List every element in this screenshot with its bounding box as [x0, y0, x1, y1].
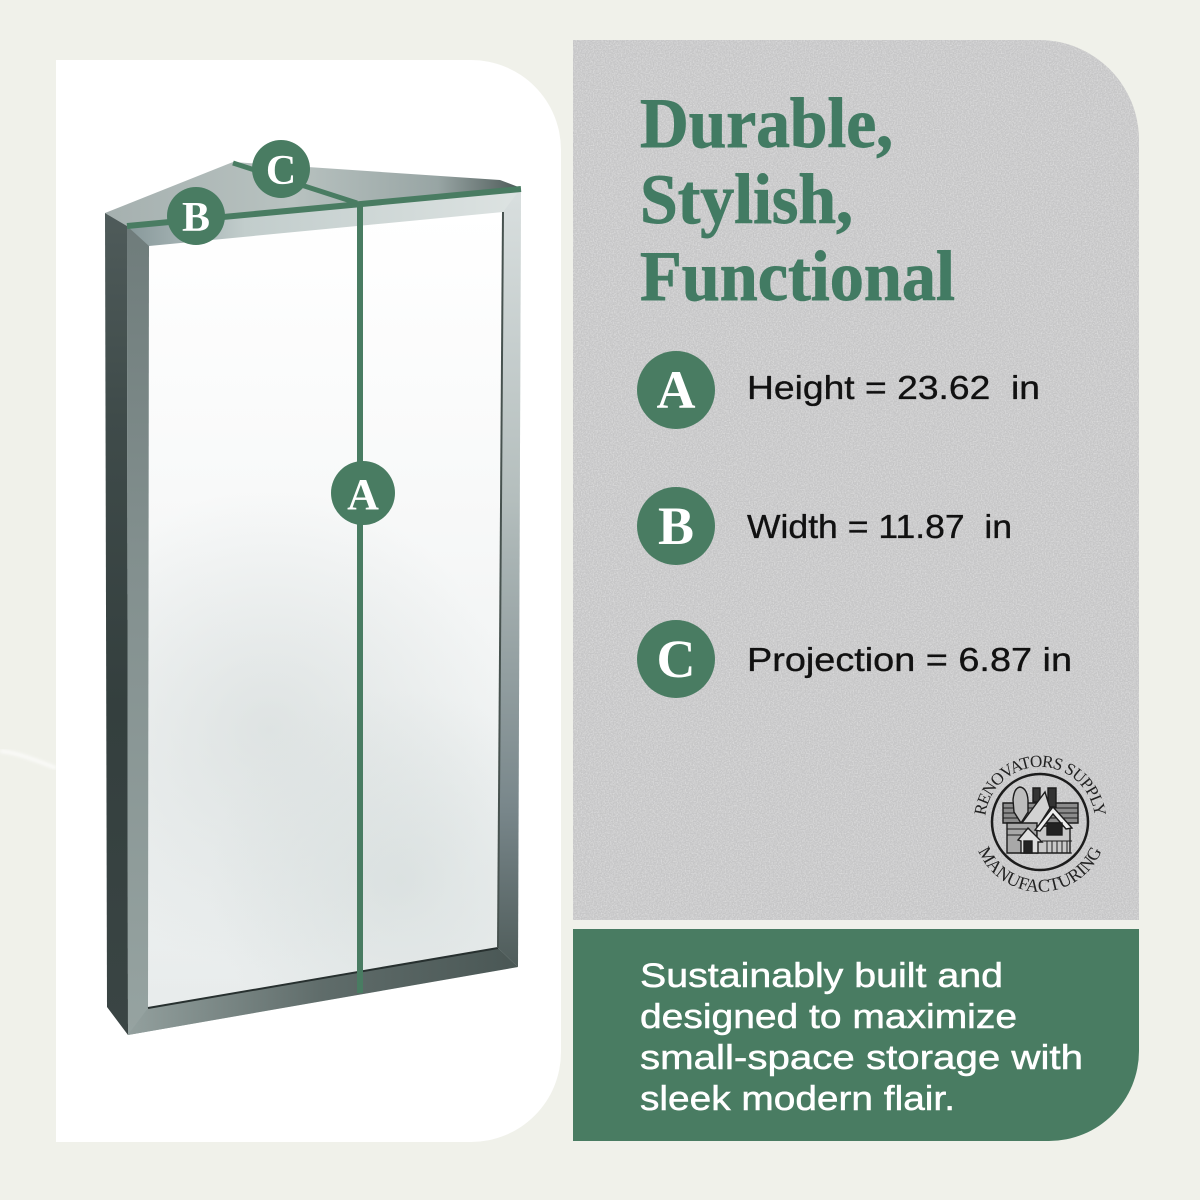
spec: width: Width = 11.87 in [747, 508, 1012, 545]
badge B [167, 187, 225, 245]
spec: height: A [656, 360, 696, 420]
title: Stylish, [640, 161, 853, 239]
title [640, 85, 955, 316]
panel: sustainability callout: designed to maximize [640, 998, 1017, 1036]
badge C [252, 140, 310, 198]
badge A [331, 461, 395, 525]
spec: height [637, 351, 1040, 429]
panel: sustainability callout [573, 929, 1139, 1141]
badge A: A [347, 470, 379, 519]
dimension line A [357, 202, 363, 993]
panel: sustainability callout: Sustainably built and [640, 957, 1003, 995]
spec: projection [637, 620, 1072, 698]
spec: width: B [658, 496, 694, 556]
panel: sustainability callout: small-space storage with [640, 1039, 1083, 1077]
spec: width [637, 487, 1012, 565]
cabinet illustration [105, 162, 521, 1035]
icon: house [1003, 787, 1078, 853]
spec: projection: C [656, 629, 696, 689]
badge B: B [182, 195, 210, 241]
logo: Renovators Supply Manufacturing: MANUFACTURING [978, 846, 1101, 892]
dimension line B [127, 189, 521, 226]
logo: Renovators Supply Manufacturing: RENOVATORS SUPPLY [974, 756, 1106, 816]
spec: height: Height = 23.62 in [747, 369, 1040, 406]
dimension line C [233, 163, 357, 203]
title: Durable, [640, 85, 893, 163]
decorative wisp [0, 751, 56, 768]
panel: product image [56, 60, 561, 1142]
badge C: C [266, 148, 296, 194]
panel: specifications [573, 40, 1139, 920]
panel: sustainability callout: sleek modern flair. [640, 1080, 955, 1118]
spec: projection: Projection = 6.87 in [747, 641, 1072, 678]
title: Functional [640, 238, 955, 316]
logo: Renovators Supply Manufacturing [974, 756, 1106, 892]
